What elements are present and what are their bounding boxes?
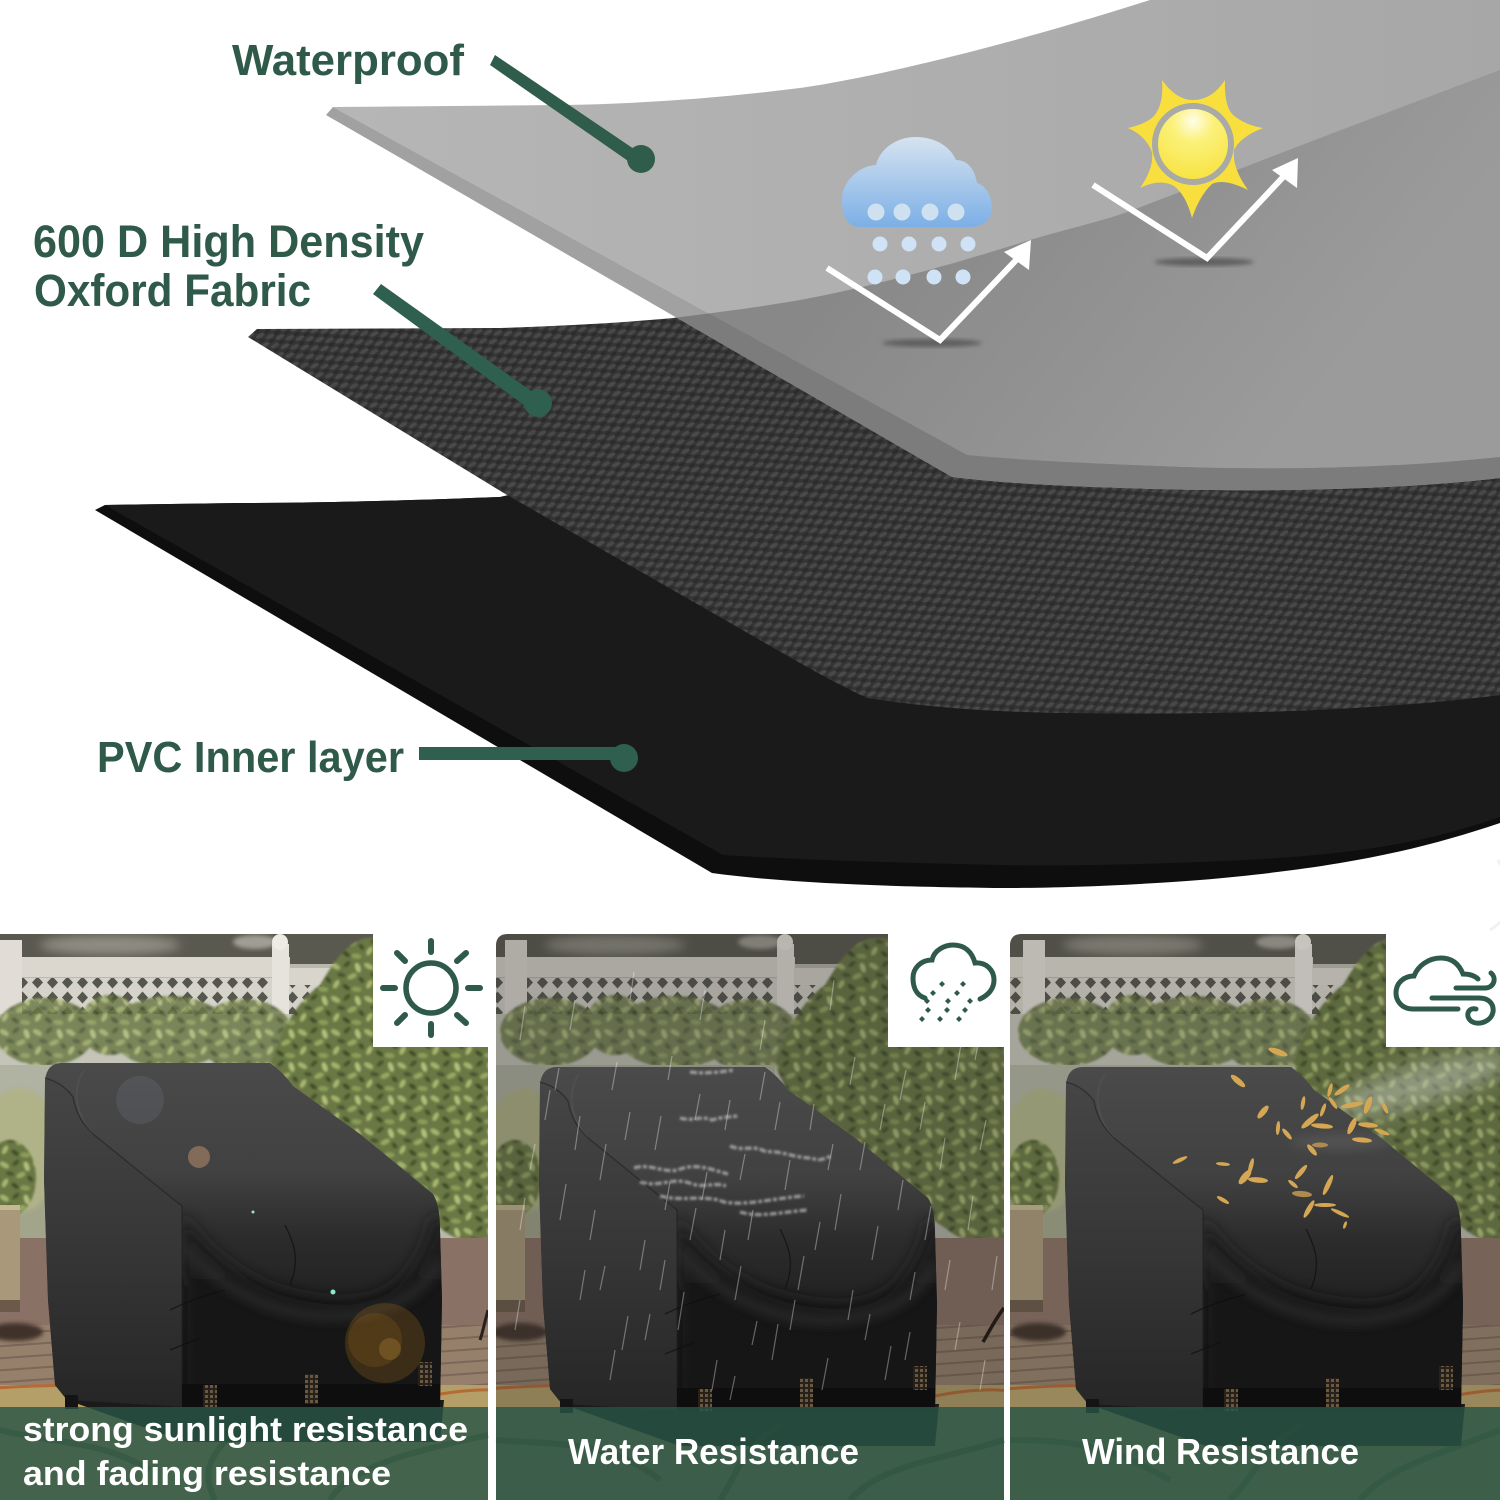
panel: water resistance — [475, 934, 1015, 1500]
label: 600 D High Density Oxford Fabric: Oxford Fabric — [34, 265, 311, 316]
icon: yellow sun — [1128, 80, 1263, 218]
photo: chair in rain — [475, 934, 1015, 1500]
leader: Waterproof — [490, 55, 655, 173]
arrow: sun deflected — [1093, 158, 1298, 266]
caption band: sunlight — [0, 1407, 488, 1500]
caption band: water: Water Resistance — [568, 1431, 859, 1472]
layer: 600D oxford fabric — [248, 70, 1500, 714]
photo: chair in wind — [993, 934, 1500, 1500]
label: 600 D High Density Oxford Fabric — [33, 216, 424, 316]
label: PVC Inner layer: PVC Inner layer — [97, 733, 404, 782]
label: Waterproof: Waterproof — [232, 36, 464, 85]
icon: blue rain cloud — [842, 137, 992, 284]
label: 600 D High Density Oxford Fabric: 600 D High Density — [33, 216, 424, 267]
caption band: sunlight: strong sunlight resistance — [23, 1411, 468, 1449]
flying leaves — [1172, 1046, 1390, 1229]
caption band: wind — [1010, 1407, 1500, 1500]
caption band: sunlight: and fading resistance — [23, 1455, 391, 1493]
arrow: rain deflected — [827, 240, 1031, 347]
layer: black PVC inner layer — [95, 470, 1500, 888]
caption band: wind: Wind Resistance — [1082, 1431, 1359, 1472]
leader: Oxford Fabric — [373, 284, 552, 417]
panel: wind resistance — [993, 934, 1500, 1500]
layer: waterproof coating — [326, 0, 1500, 490]
icon box: sun — [373, 934, 488, 1047]
photo: chair in sun — [0, 934, 510, 1500]
leader: PVC Inner layer — [419, 744, 638, 772]
icon box: rain cloud — [888, 934, 1004, 1047]
material layers illustration — [95, 0, 1500, 888]
panel: sunlight resistance — [0, 934, 510, 1500]
icon box: wind cloud — [1386, 934, 1500, 1047]
caption band: water — [496, 1407, 1004, 1500]
